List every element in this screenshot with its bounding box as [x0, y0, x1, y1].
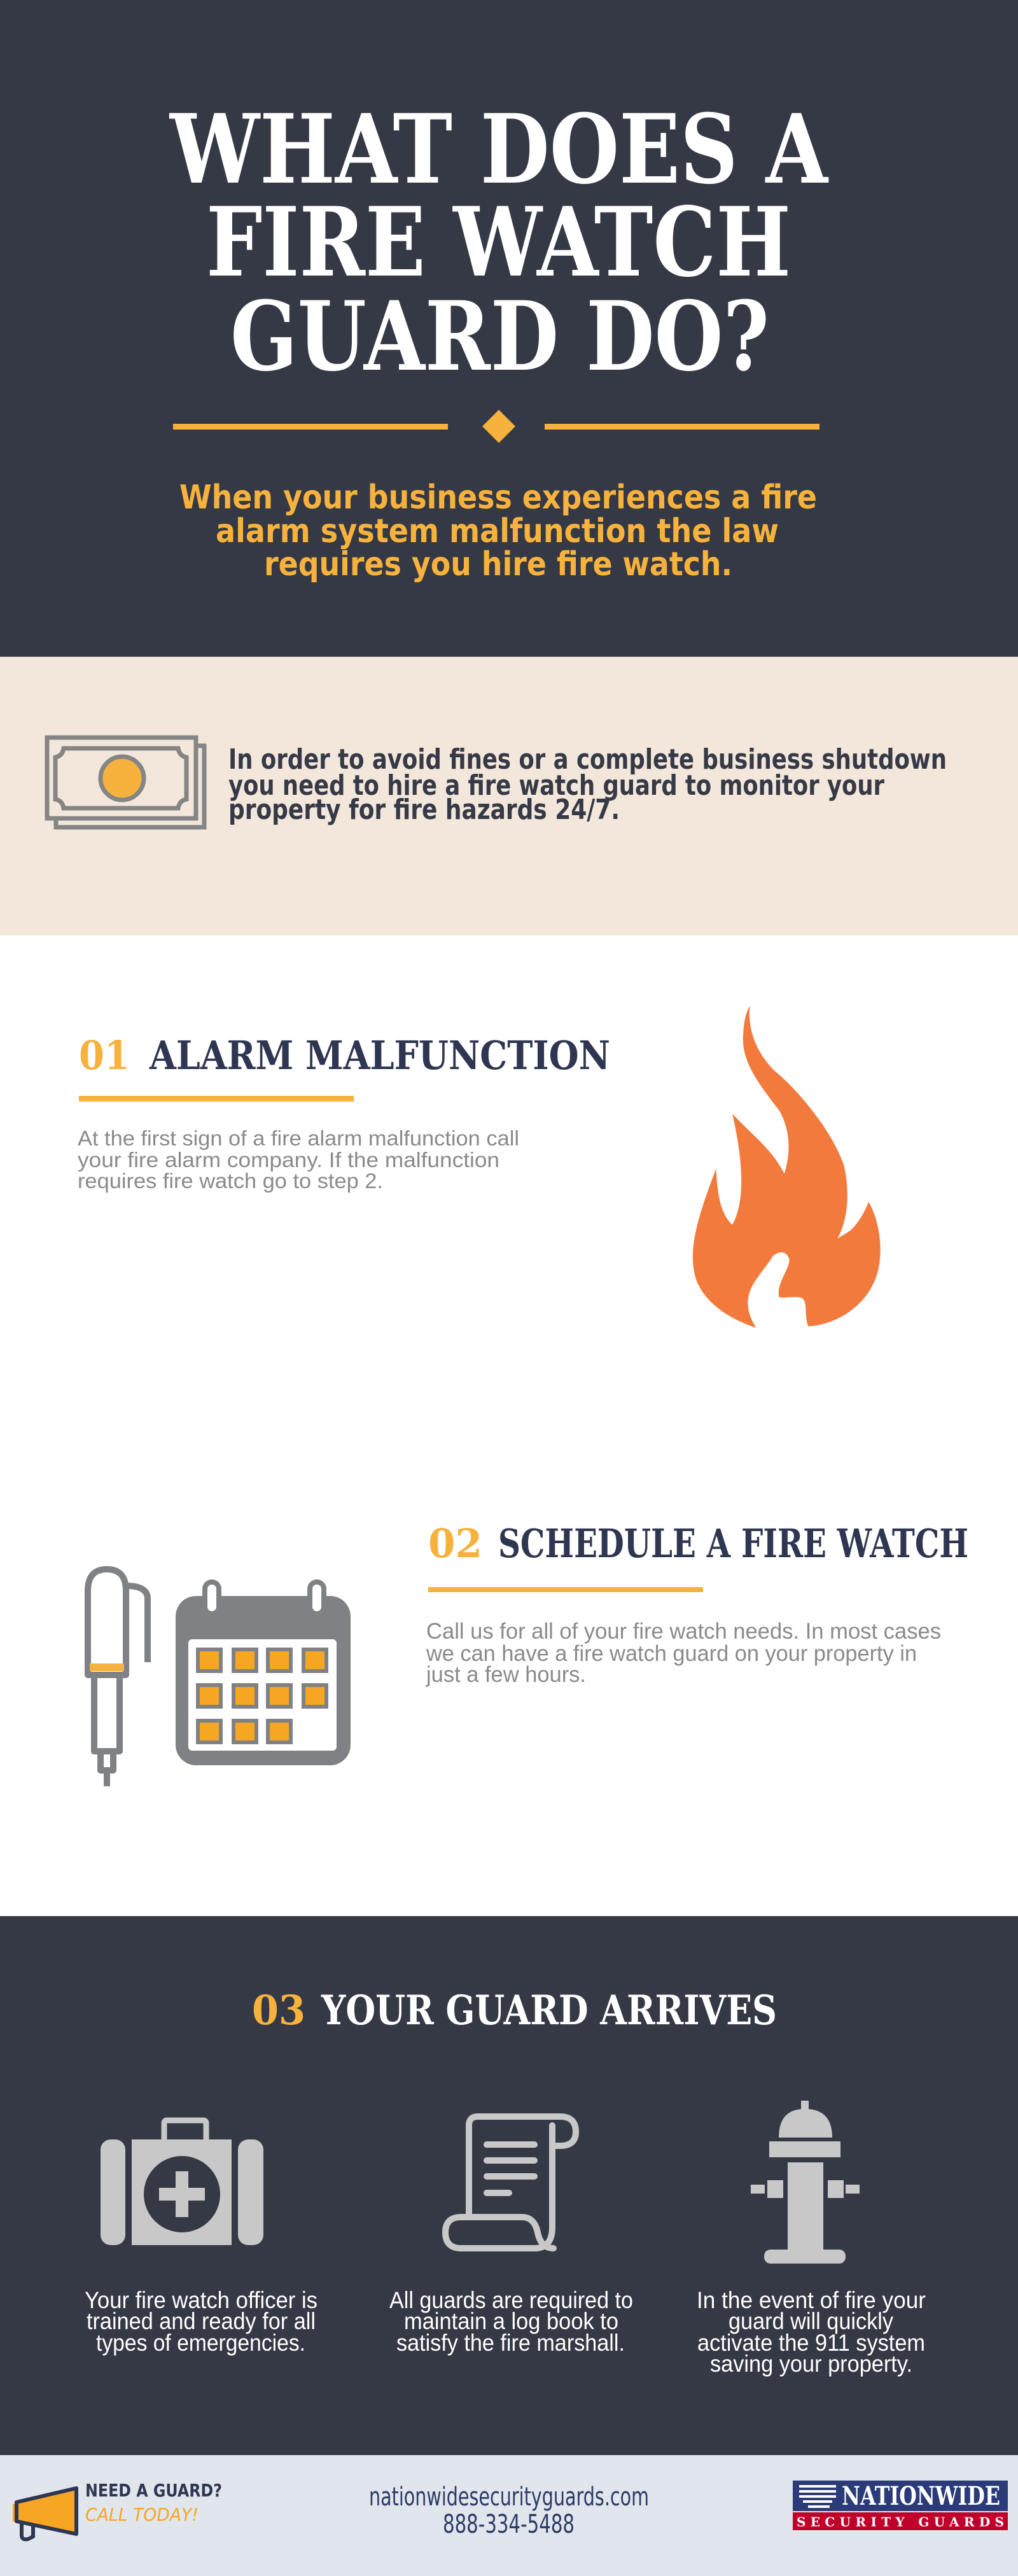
text: column 3: activate the 911 system: [697, 2330, 925, 2356]
text: step 02 body: we can have a fire watch guard on your property in: [426, 1641, 917, 1666]
text: column 3: saving your property.: [710, 2351, 912, 2377]
text: column 1: Your fire watch officer is: [85, 2287, 317, 2313]
subtitle: requires you hire fire watch.: [264, 545, 732, 584]
text: fines notice: [228, 743, 947, 826]
icon: megaphone: [13, 2488, 78, 2539]
logo: nationwide security guards: SECURITY GUARDS: [797, 2514, 1004, 2530]
text: contact website and phone: [369, 2482, 649, 2539]
logo: nationwide security guards: [793, 2481, 1008, 2530]
panel: footer: [0, 2455, 1018, 2576]
text: step 02 body: just a few hours.: [426, 1662, 586, 1687]
icon: calendar: [176, 1582, 351, 1765]
panel: fines notice: [0, 657, 1018, 935]
text: step 01 body: At the first sign of a fire alarm malfunction call: [78, 1126, 519, 1150]
heading: 01 alarm malfunction: ALARM MALFUNCTION: [149, 1032, 610, 1079]
text: need a guard call today: [85, 2480, 222, 2525]
text: column 2: satisfy the fire marshall.: [396, 2330, 625, 2356]
panel: step 03 your guard arrives: [0, 1916, 1018, 2455]
title: WHAT DOES A: [169, 94, 829, 206]
text: contact website and phone: nationwidesecurityguards.com: [369, 2482, 649, 2512]
heading: 03 your guard arrives: 03: [252, 1987, 305, 2034]
text: column 1: trained and ready for all: [87, 2308, 316, 2334]
text: need a guard call today: CALL TODAY!: [85, 2504, 199, 2525]
text: column 2: [389, 2287, 633, 2356]
panel: step 02 schedule a fire watch: [0, 1425, 1018, 1916]
heading: 02 schedule a fire watch: 02: [428, 1520, 482, 1567]
text: column 3: guard will quickly: [729, 2308, 893, 2334]
title: GUARD DO?: [230, 281, 769, 393]
subtitle: [179, 479, 817, 584]
text: step 01 body: [78, 1126, 519, 1193]
text: column 3: In the event of fire your: [697, 2287, 926, 2313]
text: contact website and phone: 888-334-5488: [443, 2510, 575, 2539]
text: column 2: All guards are required to: [389, 2287, 633, 2313]
title: [169, 94, 829, 393]
text: column 3: [697, 2287, 926, 2377]
text: step 01 body: requires fire watch go to step 2.: [78, 1169, 383, 1193]
heading: 03 your guard arrives: YOUR GUARD ARRIVES: [321, 1987, 777, 2034]
panel: header: [0, 0, 1018, 657]
title: FIRE WATCH: [206, 186, 791, 298]
divider with diamond: [173, 410, 819, 443]
heading: 01 alarm malfunction: 01: [79, 1032, 130, 1079]
icon: log book scroll: [445, 2117, 576, 2248]
icon: fire hydrant: [751, 2101, 860, 2264]
text: column 1: [85, 2287, 317, 2356]
subtitle: When your business experiences a fire: [179, 479, 817, 517]
text: column 1: types of emergencies.: [96, 2330, 305, 2356]
text: step 01 body: your fire alarm company. If the malfunction: [78, 1148, 499, 1172]
icon: flame: [693, 1006, 881, 1328]
icon: first aid kit: [101, 2120, 263, 2245]
text: column 2: maintain a log book to: [404, 2308, 618, 2334]
text: fines notice: property for fire hazards 24/7.: [228, 794, 620, 826]
text: need a guard call today: NEED A GUARD?: [85, 2480, 222, 2501]
icon: pen: [88, 1569, 148, 1786]
icon: money bill: [47, 738, 204, 827]
panel: step 01 alarm malfunction: [0, 935, 1018, 1425]
text: step 02 body: [426, 1619, 941, 1687]
text: step 02 body: Call us for all of your fire watch needs. In most cases: [426, 1619, 941, 1644]
subtitle: alarm system malfunction the law: [216, 512, 779, 550]
